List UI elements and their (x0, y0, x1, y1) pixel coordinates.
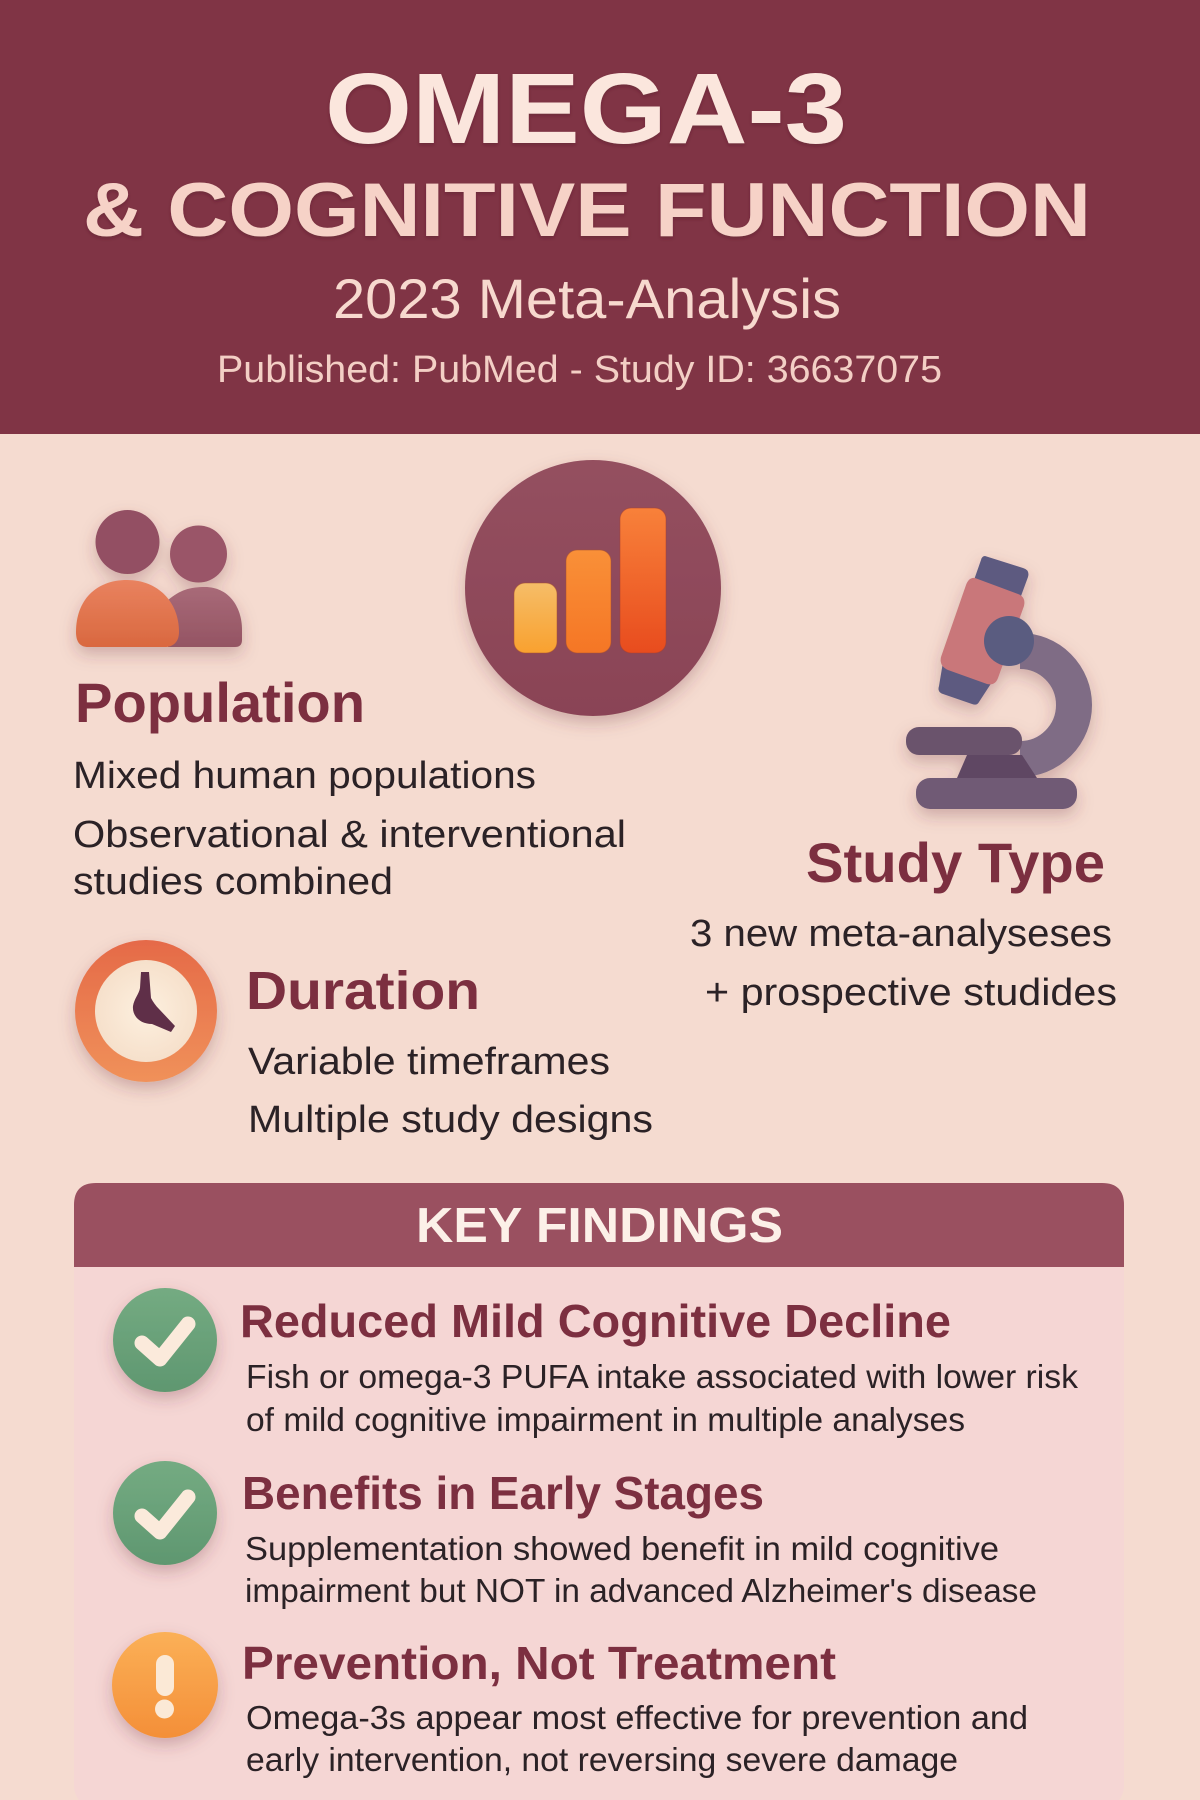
study type details (690, 913, 1117, 1014)
finding 1 text: Fish or omega-3 PUFA intake associated with lower risk (246, 1358, 1078, 1395)
finding 2 text: Supplementation showed benefit in mild cognitive (245, 1530, 999, 1567)
duration details: Multiple study designs (248, 1099, 653, 1141)
finding 3 (112, 1632, 1028, 1778)
panel body (74, 1183, 1124, 1800)
panel: duration (75, 940, 653, 1141)
duration details: Variable timeframes (248, 1041, 610, 1083)
heading: study type: Study Type (806, 831, 1105, 894)
subtitle: 2023 Meta-Analysis (333, 267, 841, 330)
finding 3 heading: Prevention, Not Treatment (242, 1637, 836, 1689)
population details: Mixed human populations (73, 755, 536, 797)
population details: Observational & interventional (73, 814, 626, 856)
icon: bar chart badge (465, 460, 721, 716)
icon: warning (112, 1632, 218, 1738)
finding 3 text (246, 1699, 1028, 1778)
study type details: 3 new meta-analyseses (690, 913, 1112, 955)
icon: clock (75, 940, 217, 1082)
icon: microscope (906, 556, 1077, 809)
heading: duration: Duration (246, 961, 480, 1021)
population details (73, 755, 626, 903)
heading: key findings: KEY FINDINGS (416, 1199, 783, 1253)
panel: key findings (74, 1183, 1124, 1800)
finding 1 text: of mild cognitive impairment in multiple analyses (246, 1401, 965, 1438)
panel: study type (690, 556, 1117, 1014)
icon: green check (113, 1288, 217, 1392)
study type details: + prospective studides (705, 972, 1117, 1014)
publication details: Published: PubMed - Study ID: 36637075 (217, 349, 942, 391)
finding 2 heading: Benefits in Early Stages (242, 1467, 764, 1519)
population details: studies combined (73, 861, 393, 903)
finding 2 text: impairment but NOT in advanced Alzheimer's disease (245, 1572, 1037, 1609)
finding 3 text: Omega-3s appear most effective for prevention and (246, 1699, 1028, 1736)
finding 1 (113, 1288, 1078, 1438)
icon: green check (113, 1461, 217, 1565)
duration details (248, 1041, 653, 1141)
header banner (0, 0, 1200, 434)
finding 2 (113, 1461, 1037, 1609)
panel: population (73, 510, 626, 903)
icon: people (76, 510, 242, 647)
finding 1 text (246, 1358, 1078, 1438)
heading: population: Population (75, 671, 365, 734)
title: Omega-3: OMEGA-3 (325, 53, 847, 165)
title: cognitive function: & COGNITIVE FUNCTION (83, 168, 1091, 253)
finding 3 text: early intervention, not reversing severe damage (246, 1741, 958, 1778)
section header bar (74, 1183, 1124, 1267)
finding 1 heading: Reduced Mild Cognitive Decline (240, 1295, 951, 1347)
finding 2 text (245, 1530, 1037, 1609)
